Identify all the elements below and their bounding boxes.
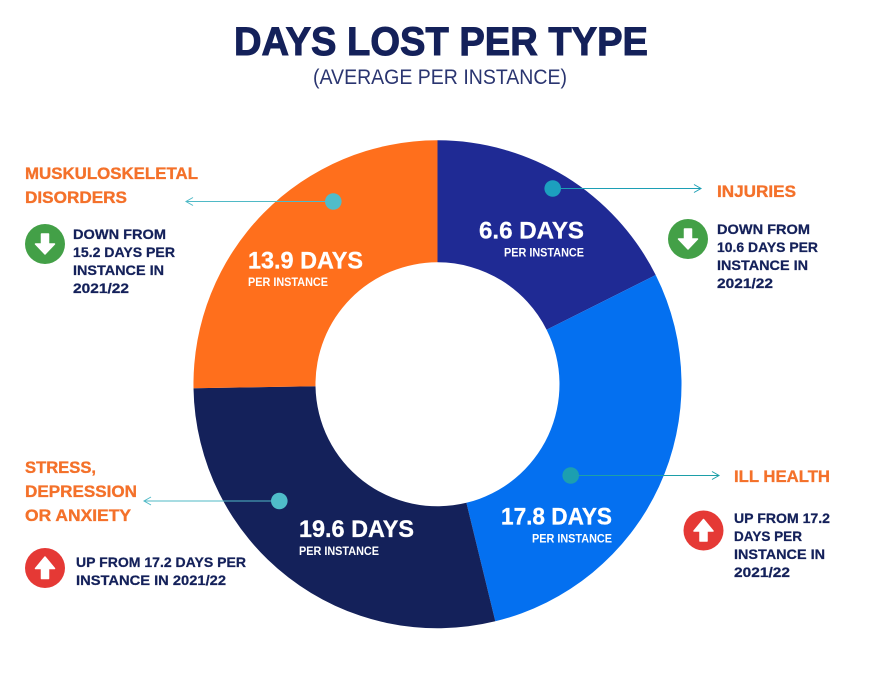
arrow: injuries — [544, 180, 701, 197]
note: ill health: UP FROM 17.2 — [734, 510, 830, 526]
note: musculoskeletal: 15.2 DAYS PER — [73, 244, 175, 260]
value: 6.6 days — [479, 218, 584, 260]
note: injuries — [717, 221, 818, 291]
note: musculoskeletal: DOWN FROM — [73, 226, 166, 242]
heading: musculoskeletal disorders — [25, 164, 198, 207]
segment: injuries — [438, 140, 656, 330]
arrow: stress — [144, 493, 288, 509]
note: musculoskeletal — [73, 226, 175, 296]
value: 6.6 days: PER INSTANCE — [504, 246, 584, 260]
value: 19.6 days: 19.6 DAYS — [299, 516, 414, 543]
heading: ill health: ILL HEALTH — [734, 467, 830, 486]
note: injuries: DOWN FROM — [717, 221, 810, 237]
icon: red up arrow — [684, 510, 724, 550]
note: injuries: 2021/22 — [717, 275, 773, 291]
heading: musculoskeletal disorders: DISORDERS — [25, 188, 127, 207]
donut chart — [193, 140, 682, 628]
note: musculoskeletal: 2021/22 — [73, 280, 129, 296]
value: 17.8 days — [501, 504, 612, 545]
note: injuries: INSTANCE IN — [717, 257, 808, 273]
note: injuries: 10.6 DAYS PER — [717, 239, 818, 255]
value: 13.9 days: PER INSTANCE — [248, 275, 328, 289]
note: ill health: INSTANCE IN — [734, 546, 825, 562]
title: DAYS LOST PER TYPE — [234, 20, 648, 64]
value: 17.8 days: 17.8 DAYS — [501, 504, 612, 530]
note: stress — [76, 554, 246, 588]
note: stress: UP FROM 17.2 DAYS PER — [76, 554, 246, 570]
note: ill health: 2021/22 — [734, 564, 790, 580]
value: 13.9 days — [248, 248, 363, 289]
icon: green down arrow — [668, 219, 708, 259]
heading: injuries: INJURIES — [717, 182, 796, 201]
icon: green down arrow — [25, 224, 65, 264]
heading: stress, depression or anxiety — [25, 458, 137, 525]
heading: stress, depression or anxiety: DEPRESSION — [25, 482, 137, 501]
note: stress: INSTANCE IN 2021/22 — [76, 572, 226, 588]
note: musculoskeletal: INSTANCE IN — [73, 262, 164, 278]
subtitle: (AVERAGE PER INSTANCE) — [313, 66, 567, 89]
heading: musculoskeletal disorders: MUSKULOSKELETAL — [25, 164, 198, 183]
heading: stress, depression or anxiety: STRESS, — [25, 458, 96, 477]
arrow: ill health — [562, 467, 719, 484]
heading: stress, depression or anxiety: OR ANXIETY — [25, 506, 132, 525]
value: 17.8 days: PER INSTANCE — [532, 531, 612, 545]
note: ill health: DAYS PER — [734, 528, 802, 544]
value: 6.6 days: 6.6 DAYS — [479, 218, 584, 244]
segment: ill health — [466, 275, 682, 621]
value: 19.6 days: PER INSTANCE — [299, 544, 379, 558]
icon: red up arrow — [25, 548, 65, 588]
segment: stress, depression or anxiety — [194, 386, 495, 628]
arrow: musculoskeletal — [186, 193, 342, 210]
value: 13.9 days: 13.9 DAYS — [248, 248, 363, 274]
value: 19.6 days — [299, 516, 414, 558]
note: ill health — [734, 510, 830, 580]
segment: musculoskeletal disorders — [193, 140, 438, 388]
